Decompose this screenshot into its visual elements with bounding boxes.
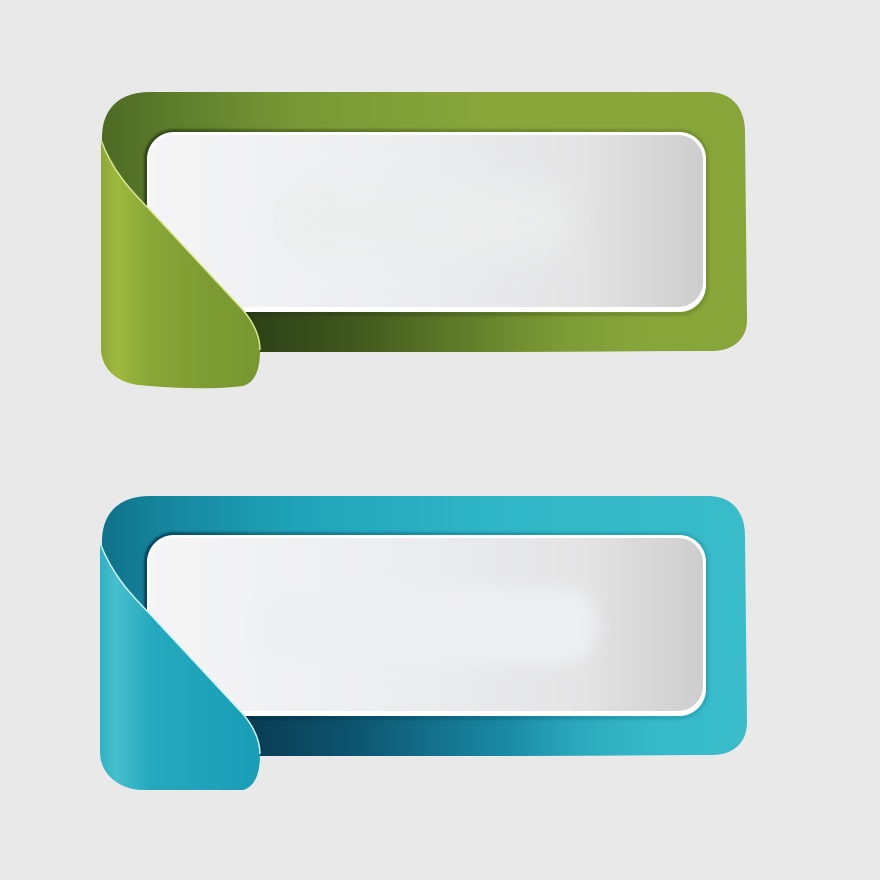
green card edge shadow xyxy=(146,131,707,314)
teal folded corner xyxy=(100,543,260,790)
teal lower shadow strip xyxy=(240,712,700,756)
green lower shadow strip xyxy=(240,308,680,352)
teal white card xyxy=(147,535,706,716)
teal card edge shadow xyxy=(146,534,707,718)
green folded corner xyxy=(101,140,260,388)
banner: teal xyxy=(100,496,747,790)
green backing band xyxy=(102,92,747,352)
teal backing band xyxy=(102,496,747,756)
green white card xyxy=(147,132,706,312)
banner: green xyxy=(101,92,747,388)
